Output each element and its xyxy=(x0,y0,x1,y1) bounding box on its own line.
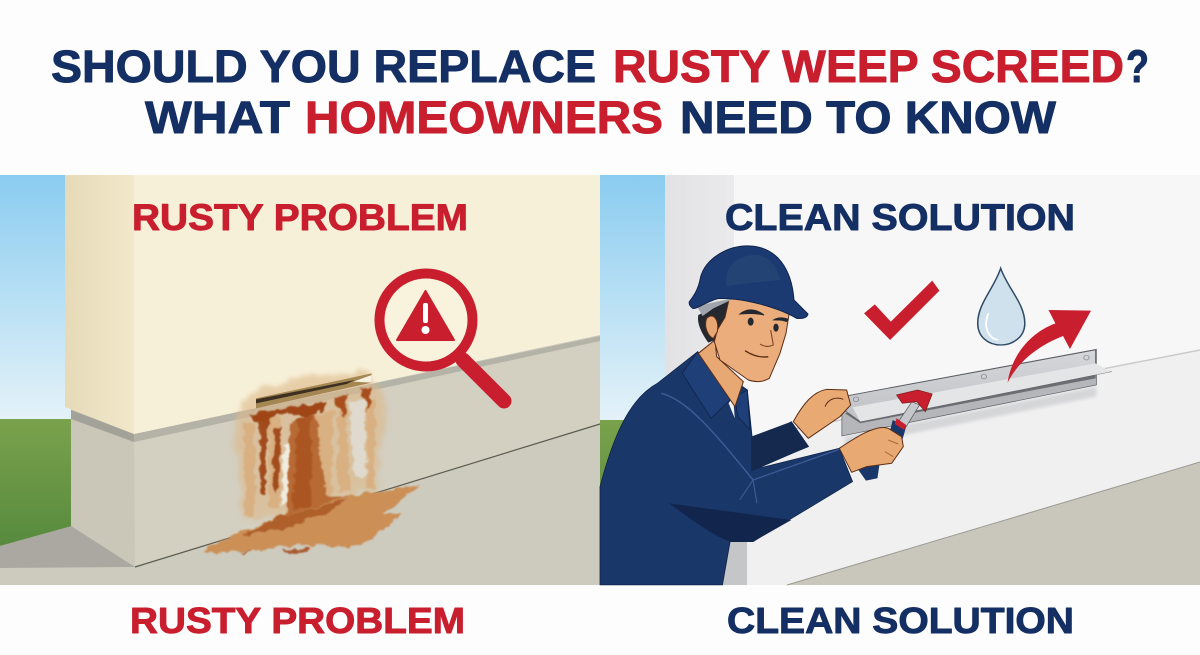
title: RUSTY WEEP SCREED xyxy=(613,41,1124,92)
weep screed xyxy=(842,349,1111,436)
icon: water drop xyxy=(978,268,1025,345)
ground xyxy=(787,462,1200,585)
face features xyxy=(740,310,788,357)
neck xyxy=(698,340,743,407)
heading: clean solution: CLEAN SOLUTION xyxy=(725,197,1075,238)
slot xyxy=(256,373,372,408)
ground concrete xyxy=(0,424,600,585)
screwdriver xyxy=(857,390,932,481)
wall side face xyxy=(65,175,134,434)
caption: rusty problem: RUSTY PROBLEM xyxy=(130,600,465,641)
worker head and hands xyxy=(689,246,903,472)
foundation side xyxy=(71,408,135,567)
icon: check mark xyxy=(864,281,939,340)
grey helmet band xyxy=(697,297,737,316)
title: ? xyxy=(1126,41,1149,92)
ear xyxy=(706,316,718,338)
grass xyxy=(0,419,72,546)
hard hat xyxy=(689,246,808,318)
title: SHOULD YOU REPLACE xyxy=(51,41,596,92)
grass xyxy=(600,420,666,530)
pier side xyxy=(665,175,747,585)
worker body xyxy=(600,352,853,585)
title xyxy=(51,41,1149,143)
icon: red arrow xyxy=(1008,310,1091,383)
screed shadow xyxy=(845,387,1096,447)
panel: rusty problem scene xyxy=(0,175,600,585)
icon: magnifier with warning xyxy=(380,274,504,401)
caption: clean solution: CLEAN SOLUTION xyxy=(727,600,1074,641)
rust stain xyxy=(203,370,420,556)
face xyxy=(714,295,790,382)
sky xyxy=(600,175,666,420)
sky xyxy=(0,175,72,419)
title: HOMEOWNERS xyxy=(305,92,663,143)
wall xyxy=(734,175,1200,355)
foundation front xyxy=(134,336,600,567)
right hand xyxy=(839,427,903,472)
left hand xyxy=(793,389,851,438)
wall front face xyxy=(134,175,600,434)
title: WHAT xyxy=(145,92,290,143)
panel: clean solution scene xyxy=(600,175,1200,585)
ground shadow beside foundation xyxy=(0,526,135,570)
title: NEED TO KNOW xyxy=(680,92,1057,143)
hair xyxy=(698,297,737,343)
heading: rusty problem: RUSTY PROBLEM xyxy=(132,197,468,238)
